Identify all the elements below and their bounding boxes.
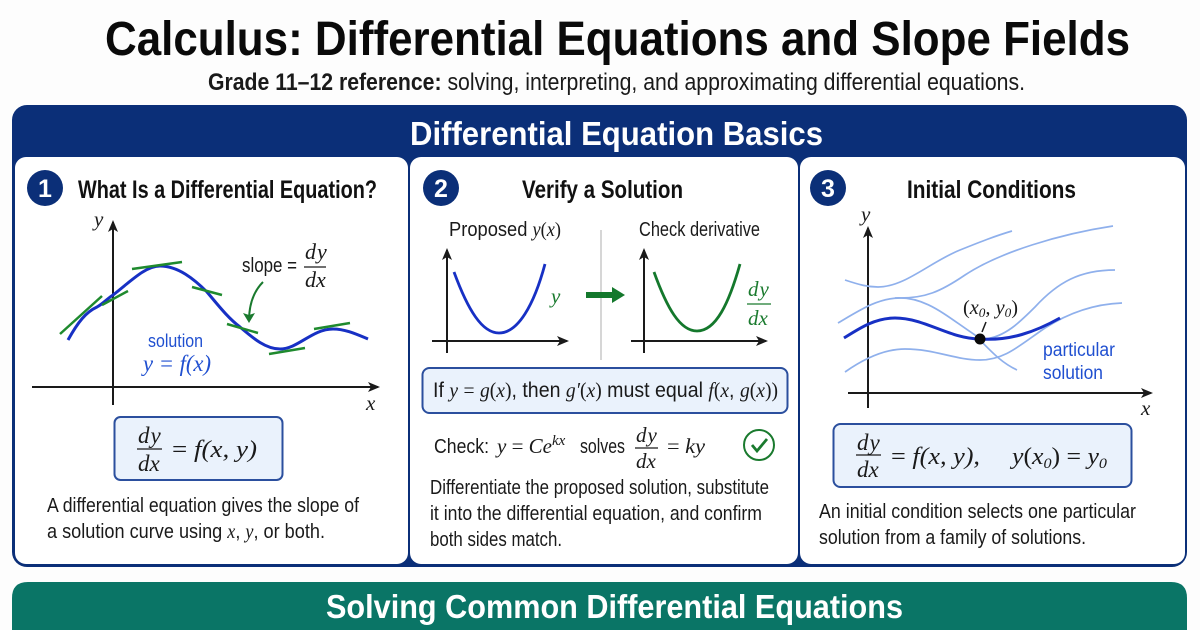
subtitle: Grade 11–12 reference: solving, interpreting, and approximating differential equations. [208,69,1025,96]
graph: proposed y(x): y [549,284,561,308]
verification rule box [422,368,788,413]
chart: family of solutions: 0 [979,305,986,320]
description 3: An initial condition selects one particular [819,500,1136,523]
check example [434,423,706,473]
verification rule box: If y = g(x), then g′(x) must equal f(x, g(x)) [433,378,778,402]
icon: check mark [744,430,774,460]
chart: family of solutions: 0 [1005,305,1012,320]
panel: differential equation basics [12,105,1187,567]
formula box 3: y(x [1012,444,1043,470]
formula box 3: = f(x, y), [891,444,980,470]
chart: solution curve with tangents: solution [148,331,203,351]
card 2: verify a solution [410,157,798,564]
arrow: proposed to derivative [586,287,625,303]
formula box 3: 0 [1043,456,1052,472]
check example: kx [552,433,566,449]
description 2: it into the differential equation, and confirm [430,502,762,525]
formula box 3 [834,424,1132,487]
description 1: A differential equation gives the slope of [47,494,359,517]
formula box 3: dy [857,430,881,455]
heading 1: What Is a Differential Equation? [78,176,377,204]
chart: solution curve with tangents: y = f(x) [141,351,211,376]
graph: check derivative: dy [748,277,770,301]
description 1: a solution curve using x, y, or both. [47,520,325,543]
graph: check derivative: Check derivative [639,219,760,241]
card 1: what is a differential equation [15,157,408,564]
description 2: Differentiate the proposed solution, substitute [430,476,769,499]
chart: family of solutions: ) [1011,297,1018,319]
graph: proposed y(x): Proposed y(x) [449,219,561,241]
panel: solving common differential equations [12,582,1187,630]
badge 2 [423,170,459,206]
title: Calculus: Differential Equations and Slope Fields [105,13,1130,66]
chart: solution curve with tangents: slope = [242,255,297,277]
chart: family of solutions: y [859,202,871,226]
description 2: both sides match. [430,528,562,551]
formula box 1 [114,417,282,480]
check example: Check: [434,436,489,458]
formula box 3: 0 [1099,456,1108,472]
chart: solution curve with tangents: dy [305,239,328,264]
chart: family of solutions: x [1140,396,1151,420]
chart: solution curve with tangents: y [92,207,104,231]
badge 2: 2 [434,175,448,203]
check example: y = Ce [495,434,552,458]
divider [600,230,602,360]
graph: proposed y(x) [432,219,567,353]
check example: solves [580,436,625,458]
description 1 [47,494,359,543]
graph: check derivative: dx [748,306,768,330]
formula box 1: dy [138,423,162,448]
badge 1 [27,170,63,206]
heading 3: Initial Conditions [907,176,1076,204]
chart: family of solutions: (x [963,297,979,319]
formula box 3: dx [857,457,880,482]
chart: solution curve with tangents: x [365,391,376,415]
check example: dx [636,449,656,473]
description 3 [819,500,1136,549]
description 3: solution from a family of solutions. [819,526,1086,549]
description 2 [430,476,769,551]
chart: family of solutions: , y [985,297,1005,319]
chart: family of solutions: particular [1043,340,1116,361]
chart: family of solutions [838,202,1151,420]
formula box 3: y [1087,444,1098,470]
formula box 3: ) = [1052,444,1081,470]
check example: dy [636,423,658,447]
section heading: solving: Solving Common Differential Equations [326,588,903,625]
card 3: initial conditions [800,157,1185,564]
badge 3 [810,170,846,206]
chart: solution curve with tangents [32,207,378,415]
check example: = ky [667,434,706,458]
heading 2: Verify a Solution [522,176,683,204]
formula box 1: dx [138,451,160,476]
chart: family of solutions: solution [1043,363,1103,384]
formula box 1: = f(x, y) [172,437,257,463]
badge 1: 1 [38,175,52,203]
section heading: basics: Differential Equation Basics [410,115,823,152]
badge 3: 3 [821,175,835,203]
chart: solution curve with tangents: dx [305,267,326,292]
graph: check derivative [631,219,771,353]
